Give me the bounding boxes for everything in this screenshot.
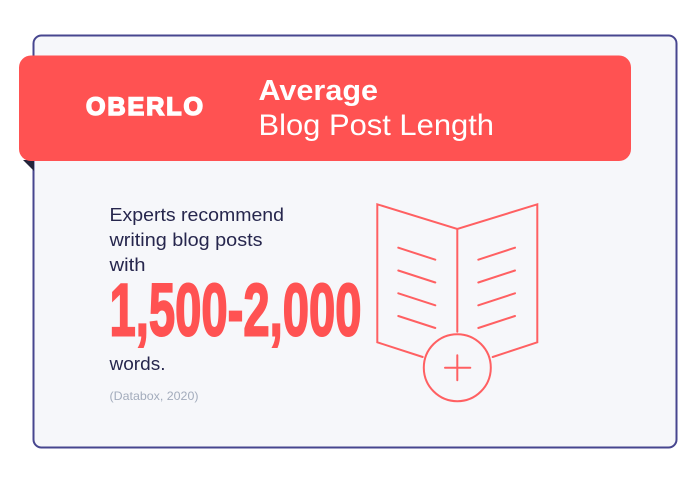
heading line 2: Blog Post Length <box>258 109 494 142</box>
source: (Databox, 2020) <box>110 389 198 403</box>
heading line 1: Average <box>258 75 378 107</box>
text block: recommendation <box>108 204 362 403</box>
heading <box>258 75 494 142</box>
intro line 1: Experts recommend <box>110 204 284 225</box>
closing line: words. <box>108 353 166 374</box>
book outline <box>377 204 537 357</box>
banner background <box>19 56 631 161</box>
key figure: 1,500-2,000 <box>110 268 362 352</box>
logo: Oberlo: OBERLO <box>86 93 203 121</box>
banner fold shadow <box>23 160 34 171</box>
intro line 2: writing blog posts <box>108 229 263 250</box>
intro line 3: with <box>108 254 146 275</box>
panel: header banner <box>19 56 631 161</box>
plus sign <box>445 355 470 380</box>
icon: open book with plus <box>377 204 537 401</box>
panel: card <box>34 36 676 448</box>
left page lines <box>398 248 435 328</box>
plus circle <box>424 334 491 401</box>
right page lines <box>478 248 515 328</box>
book spine <box>456 229 458 332</box>
